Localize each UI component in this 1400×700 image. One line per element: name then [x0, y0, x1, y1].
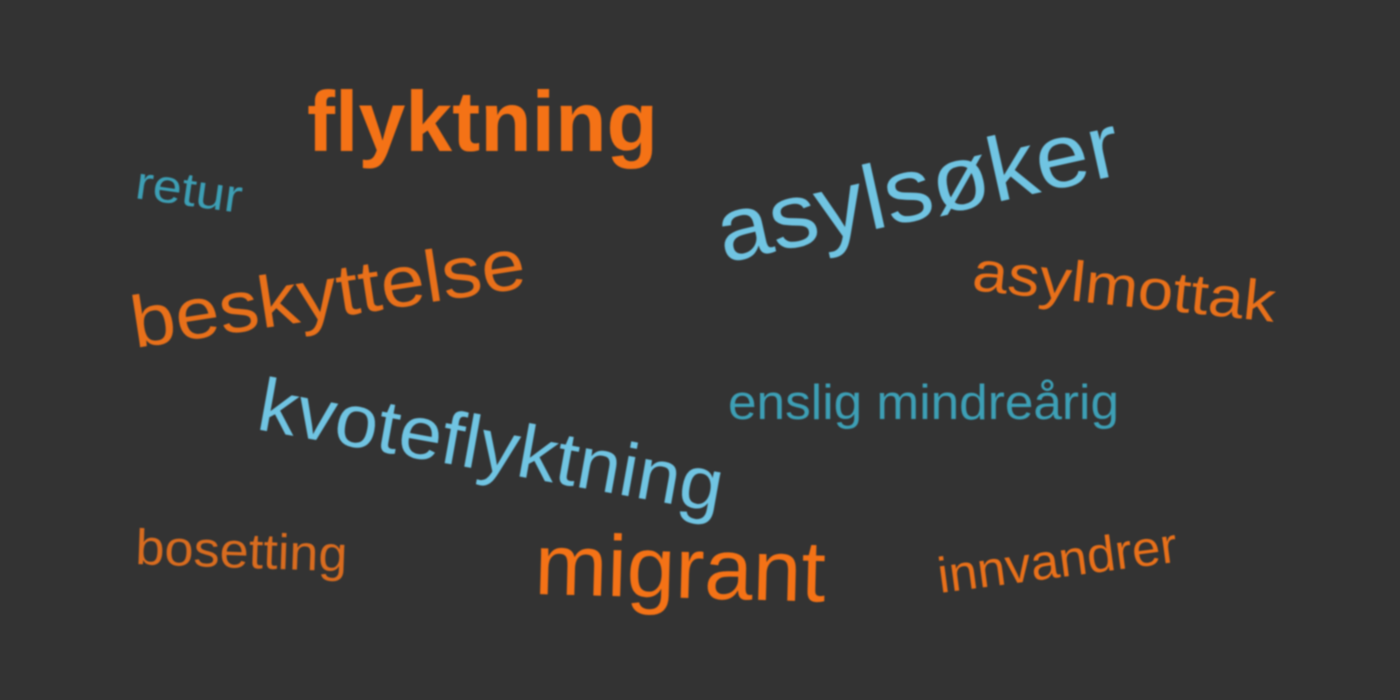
word: migrant: migrant [534, 516, 827, 621]
word: beskyttelse: beskyttelse [125, 223, 531, 364]
word: bosetting: bosetting [135, 519, 348, 582]
word: innvandrer: innvandrer [934, 517, 1180, 604]
word: asylsøker: asylsøker [706, 94, 1129, 283]
word: retur: retur [133, 155, 246, 223]
word: flyktning: flyktning [307, 75, 658, 170]
word: asylmottak: asylmottak [970, 239, 1279, 335]
word: kvoteflyktning: kvoteflyktning [252, 362, 731, 528]
word: enslig mindreårig: enslig mindreårig [728, 376, 1119, 430]
